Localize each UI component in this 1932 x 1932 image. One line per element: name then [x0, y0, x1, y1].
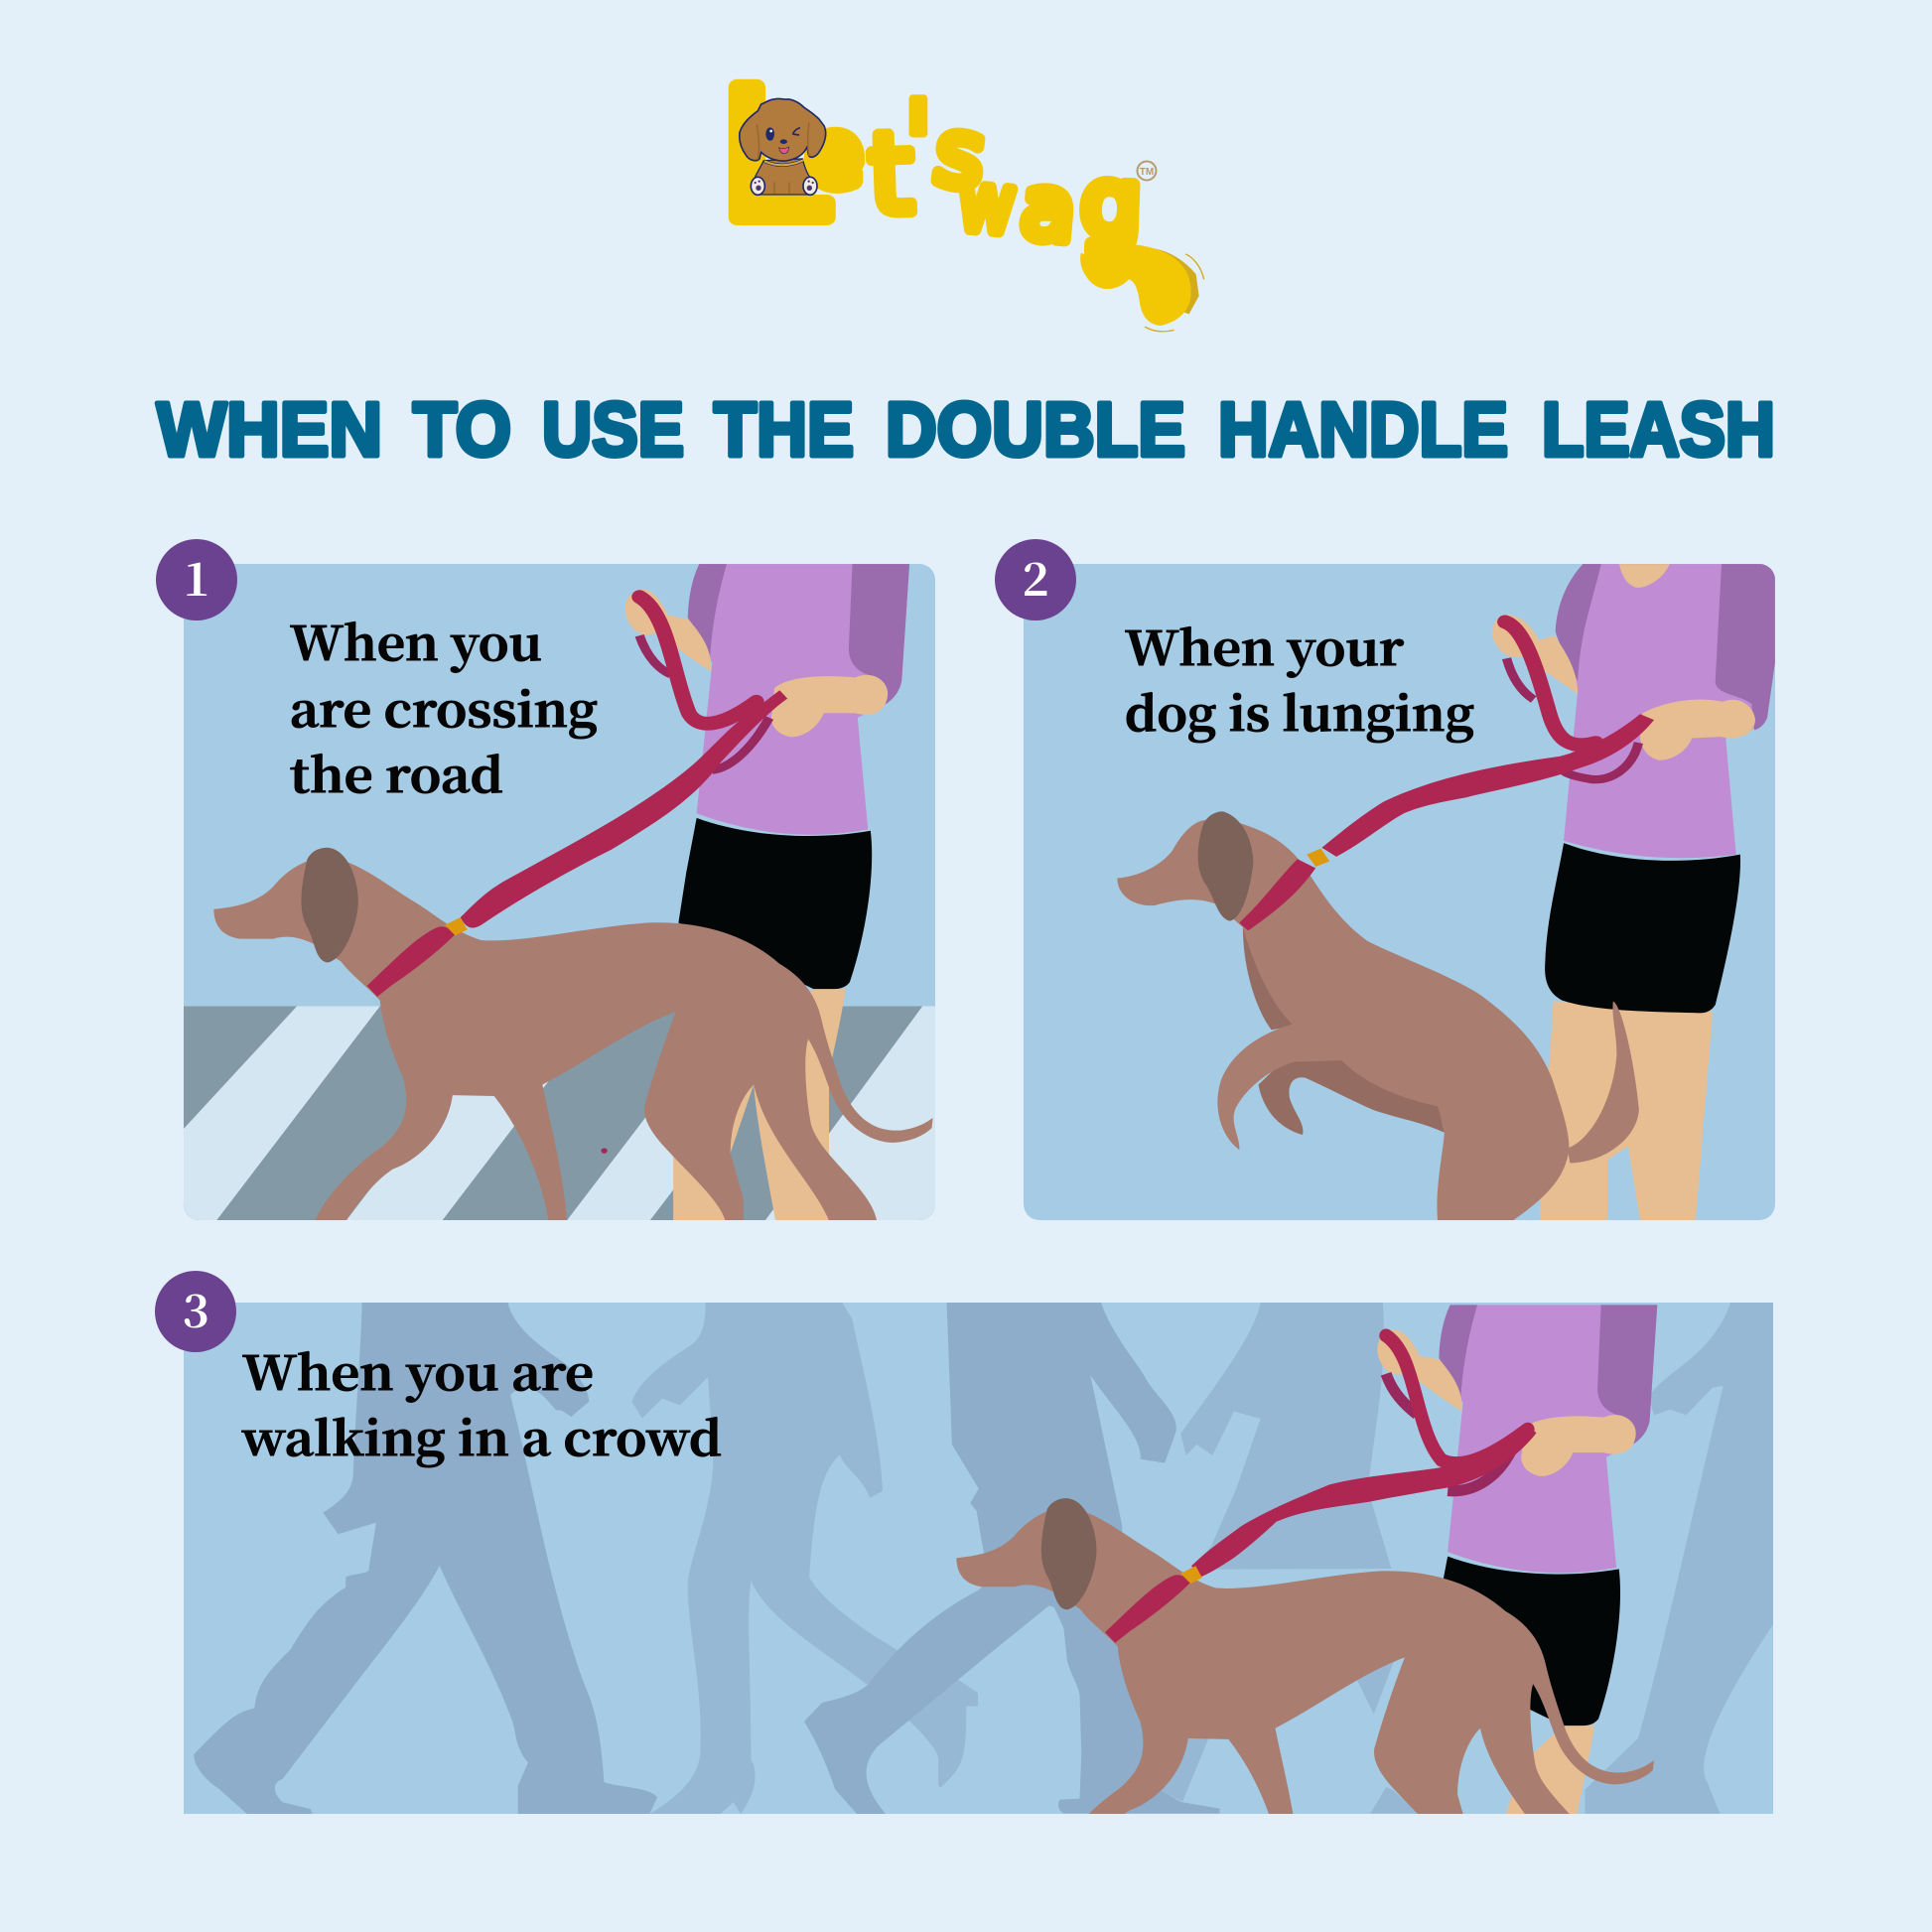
panel 2 caption: When your: [1125, 613, 1405, 679]
panel 2 illustration: [1024, 564, 1775, 1220]
infographic page: [155, 79, 1775, 1814]
panel 2: dog is lunging: [995, 539, 1775, 1220]
person panel 3: [1377, 1305, 1658, 1814]
badge 2: [995, 539, 1076, 621]
title: USE: [542, 387, 684, 473]
crowd silhouettes: [194, 1303, 1773, 1814]
panel 3: walking in a crowd: [155, 1271, 1773, 1814]
handle leash panel 3: [1191, 1335, 1537, 1577]
panel 3 caption: walking in a crowd: [241, 1403, 722, 1469]
panel 1: crossing the road: [156, 539, 938, 1220]
logo letters: L: [718, 53, 828, 260]
panel 1 caption: are crossing: [290, 674, 598, 741]
badge 1: 1: [183, 544, 210, 610]
logo trademark mark: [1138, 161, 1156, 181]
title: [157, 387, 1775, 473]
logo letters: e: [809, 108, 859, 203]
logo letters: a: [1018, 155, 1079, 262]
badge 3: [155, 1271, 236, 1352]
logo wagging tail: [1080, 244, 1204, 332]
logo letters: s: [929, 98, 991, 209]
title: LEASH: [1542, 387, 1775, 473]
panel 1 caption: the road: [290, 740, 503, 806]
title: WHEN: [157, 387, 382, 473]
panel 1 caption: When you: [290, 608, 542, 674]
logo trademark mark: TM: [1140, 167, 1154, 178]
logo letters: g: [1079, 148, 1143, 259]
panel 2 caption: dog is lunging: [1125, 678, 1474, 745]
badge 2: 2: [1022, 544, 1049, 610]
logo letters: ': [900, 72, 936, 223]
title: TO: [413, 387, 511, 473]
logo letters: [718, 53, 1143, 262]
logo letters: w: [955, 155, 1019, 251]
panel 3 caption: When you are: [242, 1337, 594, 1404]
panel 3 illustration: [184, 1303, 1773, 1814]
badge 3: 3: [182, 1276, 209, 1341]
logo letters: t: [867, 109, 915, 240]
panel 1 caption: [290, 608, 598, 806]
logo puppy mascot: [740, 98, 826, 195]
panel 1 illustration: [180, 564, 938, 1220]
logo: Let's wag: [718, 53, 1204, 332]
title: HANDLE: [1218, 387, 1508, 473]
panel 2 caption: [1125, 613, 1474, 745]
badge 1: [156, 539, 237, 621]
title: DOUBLE: [886, 387, 1185, 473]
panel 3 caption: [241, 1337, 722, 1469]
dog panel 3: [956, 1498, 1654, 1814]
title: THE: [714, 387, 854, 473]
